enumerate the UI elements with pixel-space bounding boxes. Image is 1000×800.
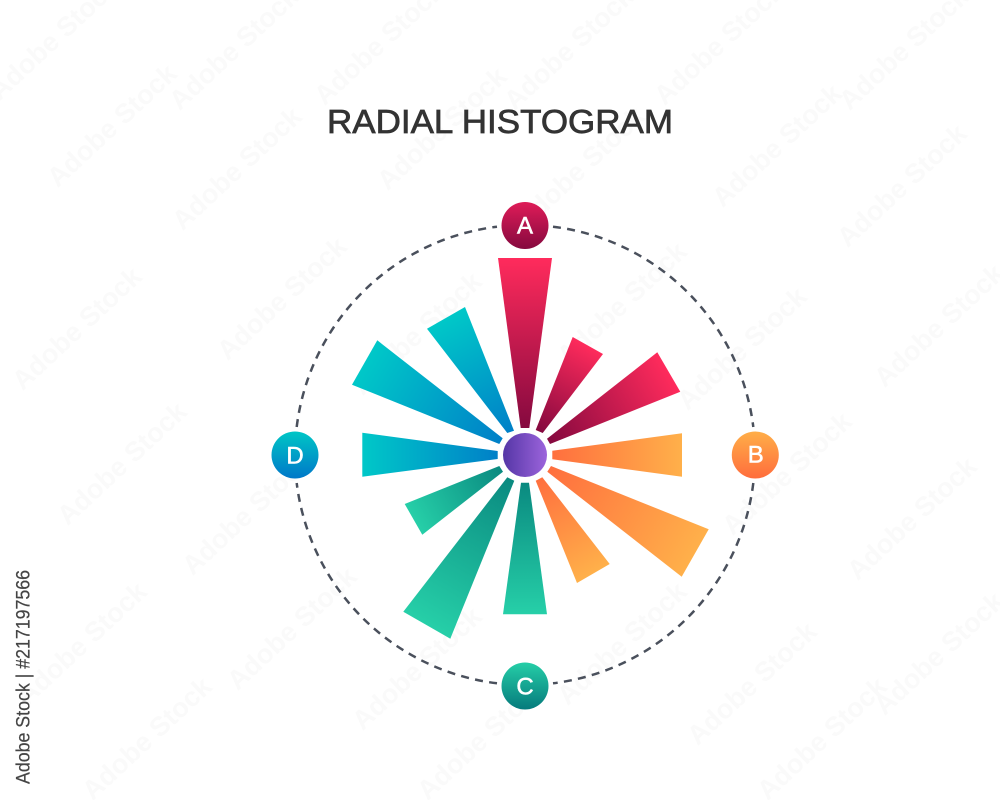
badge A: A: [517, 212, 533, 239]
badge B: [732, 432, 779, 478]
badge D: D: [286, 442, 304, 470]
badge C: [502, 662, 548, 710]
watermark pattern: Adobe Stock: [681, 616, 823, 751]
title: RADIAL HISTOGRAM: [327, 103, 673, 140]
watermark pattern: Adobe Stock: [11, 576, 153, 711]
watermark pattern: Adobe Stock: [51, 396, 193, 531]
center hub: [503, 433, 547, 477]
watermark pattern: Adobe Stock: [346, 601, 488, 736]
watermark pattern: Adobe Stock: [346, 266, 488, 401]
watermark pattern: Adobe Stock: [716, 406, 858, 541]
badge A: [502, 202, 548, 249]
watermark pattern: Adobe Stock: [706, 78, 848, 213]
bars: category D: [352, 307, 514, 477]
watermark pattern: Adobe Stock: [211, 231, 353, 366]
bars: category C: [403, 466, 547, 639]
watermark pattern: Adobe Stock: [221, 561, 363, 696]
bars: category B: [536, 433, 709, 583]
dashed circle connecting the four categories: [297, 227, 753, 683]
bars: category A: [498, 258, 680, 444]
radial histogram bars: [352, 258, 709, 639]
watermark pattern: Adobe Stock: [371, 61, 513, 196]
badge D: [272, 432, 318, 478]
side stock label: Adobe Stock | #217197566: [14, 570, 34, 784]
watermark pattern: Adobe Stock: [176, 446, 318, 581]
watermark pattern: Adobe Stock: [509, 101, 651, 236]
watermark pattern: Adobe Stock: [166, 101, 308, 236]
watermark pattern: Adobe Stock: [841, 451, 983, 586]
watermark pattern: Adobe Stock: [551, 236, 693, 371]
watermark pattern: Adobe Stock: [671, 281, 813, 416]
watermark pattern: Adobe Stock: [831, 118, 973, 253]
watermark pattern: Adobe Stock: [41, 58, 183, 193]
watermark pattern: Adobe Stock: [6, 261, 148, 396]
watermark pattern: Adobe Stock: [551, 576, 693, 711]
badge B: B: [748, 442, 764, 468]
badge C: C: [516, 674, 534, 700]
